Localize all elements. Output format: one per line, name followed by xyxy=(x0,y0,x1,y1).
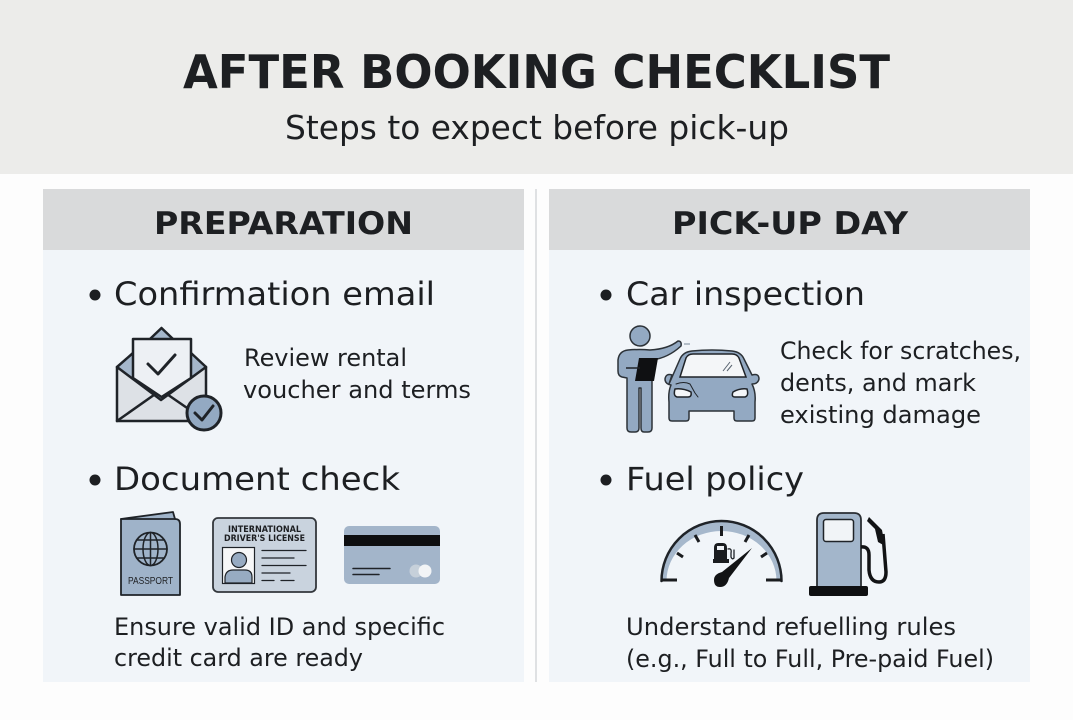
icon: fuel pump xyxy=(809,513,886,596)
text: understand refuelling rules xyxy=(626,613,994,673)
bullet heading: car inspection: Car inspection xyxy=(626,275,865,313)
text: ensure valid id xyxy=(114,613,445,672)
text: ensure valid id: credit card are ready xyxy=(114,644,363,672)
title: AFTER BOOKING CHECKLIST xyxy=(183,45,891,99)
panel heading: preparation: PREPARATION xyxy=(154,206,413,242)
bullet heading: document check: Document check xyxy=(114,460,400,498)
panel: pick-up day xyxy=(549,189,1030,682)
icon: car xyxy=(665,350,759,421)
text: ensure valid id: Ensure valid ID and specific xyxy=(114,613,445,641)
icon: fuel gauge xyxy=(661,521,782,587)
header band xyxy=(0,0,1073,174)
text: review rental: Review rental xyxy=(244,344,407,372)
panel heading: pick-up day: PICK-UP DAY xyxy=(672,206,909,242)
text: check for scratches xyxy=(780,337,1021,429)
icon: international driver's license: INTERNATIONAL xyxy=(228,525,302,535)
icon: passport xyxy=(121,512,180,595)
text: understand refuelling rules: Understand refuelling rules xyxy=(626,613,956,641)
icon: passport: PASSPORT xyxy=(128,575,173,587)
icon: credit card xyxy=(344,526,440,584)
icon: international driver's license xyxy=(213,518,316,592)
bullet heading: fuel policy: Fuel policy xyxy=(626,460,804,498)
subtitle: Steps to expect before pick-up xyxy=(285,108,789,147)
text: check for scratches: existing damage xyxy=(780,401,981,429)
text: review rental: voucher and terms xyxy=(243,376,471,404)
bullet heading: confirmation email: Confirmation email xyxy=(114,275,435,313)
icon: envelope with check xyxy=(117,328,221,430)
panel: preparation xyxy=(43,189,524,682)
text: check for scratches: Check for scratches, xyxy=(780,337,1021,365)
icon: person inspecting car xyxy=(618,326,759,432)
icon: international driver's license: DRIVER'S LICENSE xyxy=(224,534,305,544)
text: understand refuelling rules: (e.g., Full to Full, Pre-paid Fuel) xyxy=(626,645,994,673)
text: check for scratches: dents, and mark xyxy=(780,369,976,397)
text: review rental xyxy=(243,344,471,404)
